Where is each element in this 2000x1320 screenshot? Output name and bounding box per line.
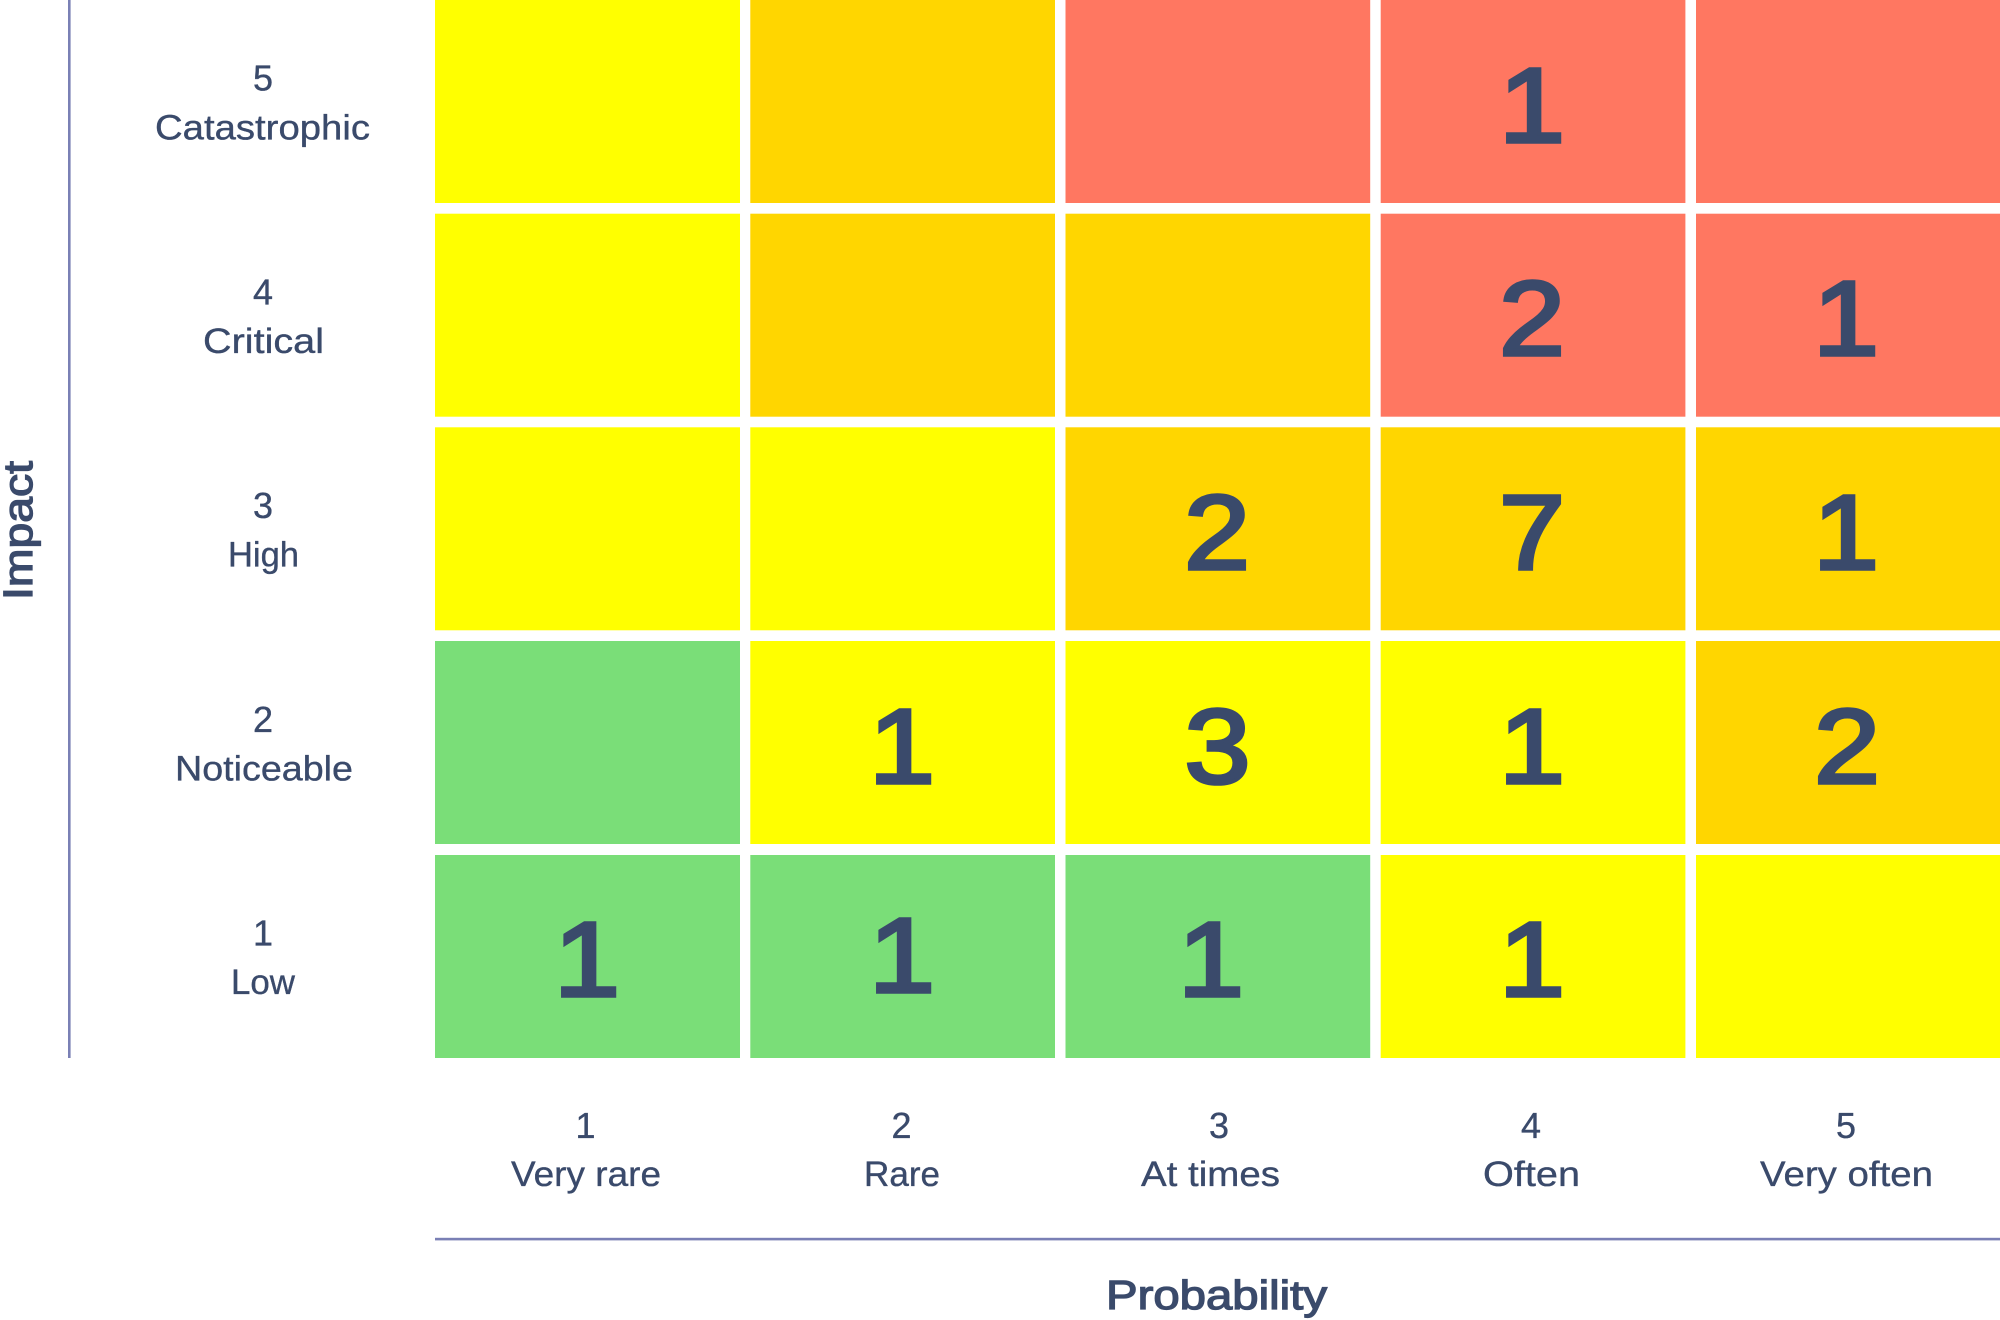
label: 2 Noticeable	[175, 699, 353, 788]
row 2 cells: 1	[1499, 688, 1565, 806]
label: 5 Very often	[1760, 1105, 1933, 1194]
row 2 cells	[435, 641, 2000, 844]
row 3 cells	[435, 427, 2000, 630]
axis line: probability	[435, 1238, 2000, 1240]
label: 5 Very often: 5	[1836, 1105, 1856, 1146]
label: 3 At times	[1141, 1105, 1280, 1194]
row 1 cells: 1	[1178, 901, 1244, 1019]
row 3 cells: 2	[1184, 474, 1250, 592]
label: 5 Catastrophic	[155, 58, 370, 148]
label: 3 At times: At times	[1141, 1155, 1280, 1194]
label: 2 Rare: Rare	[864, 1155, 940, 1194]
label: 1 Very rare: Very rare	[511, 1155, 661, 1194]
row 3 cells: 7	[1499, 474, 1565, 592]
impact scale labels	[155, 58, 370, 1002]
row 1 cells	[435, 855, 2000, 1058]
row 4 cells: 1	[1813, 260, 1879, 378]
label: 4 Critical: 4	[253, 272, 273, 312]
row 3 cells: 1	[1813, 474, 1879, 592]
label: 1 Low	[231, 912, 296, 1002]
risk matrix grid	[435, 0, 2000, 1058]
label: 4 Critical: Critical	[203, 322, 324, 361]
label: 4 Critical	[203, 272, 324, 361]
label: 3 At times: 3	[1209, 1105, 1229, 1146]
row 2 cells: 2	[1814, 688, 1880, 806]
row 4 cells	[435, 214, 2000, 417]
label: 2 Rare: 2	[891, 1105, 912, 1146]
label: 3 High: 3	[253, 485, 273, 526]
row 1 cells: 1	[869, 897, 935, 1015]
label: 4 Often: Often	[1483, 1155, 1580, 1194]
label: 3 High	[228, 485, 299, 575]
label: 3 High: High	[228, 536, 299, 575]
axis title: Probability: Probability	[1106, 1272, 1328, 1318]
label: 4 Often	[1483, 1105, 1580, 1194]
label: 1 Low: 1	[253, 912, 273, 954]
label: 2 Noticeable: 2	[253, 699, 273, 740]
probability scale labels	[511, 1105, 1933, 1194]
label: 4 Often: 4	[1521, 1105, 1541, 1146]
label: 1 Very rare	[511, 1105, 661, 1194]
row 5 cells: 1	[1499, 47, 1565, 165]
label: 1 Very rare: 1	[575, 1105, 596, 1146]
label: 5 Catastrophic: 5	[253, 58, 273, 99]
label: 1 Low: Low	[231, 963, 296, 1002]
label: 5 Catastrophic: Catastrophic	[155, 108, 370, 148]
row 2 cells: 1	[869, 688, 935, 806]
label: 2 Noticeable: Noticeable	[175, 749, 353, 788]
label: 2 Rare	[864, 1105, 940, 1194]
row 4 cells: 2	[1499, 260, 1565, 378]
row 5 cells	[435, 0, 2000, 203]
row 2 cells: 3	[1184, 688, 1250, 806]
axis line: impact	[68, 0, 71, 1058]
row 1 cells: 1	[1499, 901, 1565, 1019]
row 1 cells: 1	[554, 901, 620, 1019]
label: 5 Very often: Very often	[1760, 1155, 1933, 1194]
